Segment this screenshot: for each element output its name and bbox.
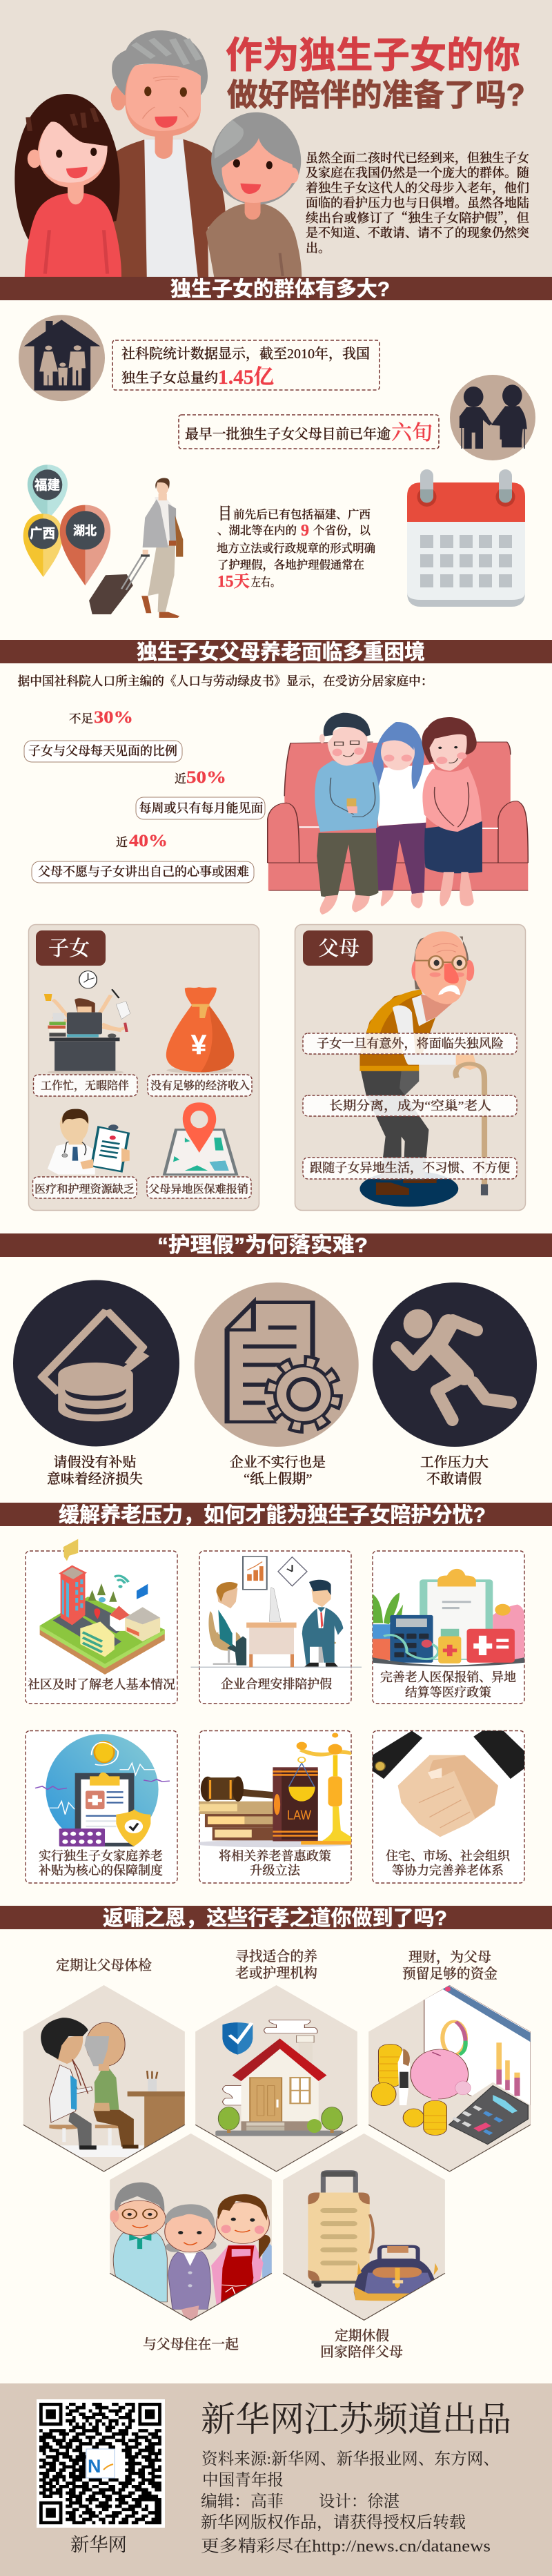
panel: hero header	[0, 0, 552, 277]
label: live together: 与父母住在一起	[143, 2336, 239, 2352]
panel: no subsidy	[13, 1280, 179, 1487]
intro paragraph: 虽然全面二孩时代已经到来，但独生子女	[306, 148, 529, 166]
icon: province map pins	[23, 465, 110, 585]
label: find care institution: 老或护理机构	[235, 1965, 317, 1981]
caption: cooperation second line: 等协力完善养老体系	[392, 1864, 504, 1877]
caption: lack of medical resources	[33, 1177, 137, 1198]
section heading: group size: 独生子女的群体有多大?	[170, 278, 390, 301]
panel: insurance card	[373, 1551, 524, 1704]
text: provinces with nursing leave: 左右。	[251, 576, 280, 589]
title line 1: 作为独生子女的你	[226, 35, 520, 76]
panel: subsidy card	[26, 1731, 177, 1883]
panel: company card	[191, 1551, 362, 1704]
illustration: doctor with clipboard	[48, 1109, 130, 1175]
label: financial planning: 预留足够的资金	[402, 1966, 497, 1982]
hexagon: doctor check-up	[23, 1985, 185, 2172]
text: no subsidy: 意味着经济损失	[47, 1471, 143, 1487]
text: provinces with nursing leave: 15天	[217, 572, 250, 591]
intro paragraph: 出。	[306, 239, 331, 257]
caption: not enough income: 没有足够的经济收入	[150, 1080, 250, 1092]
hexagon: living with parents	[110, 2134, 272, 2321]
QR code: N	[88, 2456, 101, 2477]
stat: nearly 40 percent: 父母不愿与子女讲出自己的心事或困难	[38, 865, 249, 879]
caption: risk of losing only child: 子女一旦有意外，将面临失独风险	[317, 1037, 504, 1051]
caption: cooperation: 住宅、市场、社会组织	[386, 1849, 511, 1863]
tag: parents	[303, 930, 373, 966]
label: regular leave: 回家陪伴父母	[320, 2344, 403, 2360]
illustration: law book and scale	[194, 1733, 355, 1847]
caption: subsidy: 实行独生子女家庭养老	[39, 1849, 163, 1863]
text: paper holiday: “纸上假期”	[244, 1471, 312, 1487]
QR code	[37, 2399, 165, 2528]
text: credits: 中国青年报	[202, 2471, 284, 2489]
illustration: office meeting	[191, 1557, 362, 1667]
icon: elderly couple	[450, 375, 535, 460]
section heading: how to relieve pressure: 缓解养老压力，如何才能为独生子女陪护分忧?	[59, 1504, 486, 1527]
illustration: handshake	[373, 1730, 524, 1837]
text: provinces with nursing leave: 个省份，以	[313, 524, 372, 537]
section heading: group size	[0, 277, 552, 301]
panel: footer	[0, 2383, 552, 2576]
illustration: isometric community	[40, 1539, 165, 1675]
section heading: filial duties	[0, 1906, 552, 1930]
stat: under 30 percent: 30%	[94, 708, 133, 727]
text: provinces with nursing leave: 了护理假，各地护理假通常在	[217, 558, 364, 572]
label: financial planning	[402, 1949, 497, 1982]
text: provinces with nursing leave: 前先后已有包括福建、广西	[233, 508, 371, 521]
illustration: family on sofa	[268, 713, 528, 915]
stat: nearly 40 percent: 40%	[129, 832, 168, 850]
text: provinces with nursing leave	[217, 505, 375, 591]
section heading: multiple difficulties: 独生子女父母养老面临多重困境	[137, 641, 425, 664]
icon: province map pins: 福建	[34, 478, 60, 493]
caption: insurance: 完善老人医保报销、异地	[380, 1670, 516, 1684]
stat: nearly 40 percent	[32, 832, 254, 883]
stat: under 30 percent	[24, 708, 182, 762]
section heading: filial duties: 返哺之恩，这些行孝之道你做到了吗?	[103, 1907, 447, 1930]
caption: subsidy second line: 补贴为核心的保障制度	[39, 1864, 163, 1877]
icon: province map pins: 湖北	[73, 524, 97, 538]
intro paragraph: 面临的看护压力也与日俱增。虽然各地陆	[306, 193, 529, 211]
panel: paper holiday	[195, 1282, 359, 1487]
icon: family in house	[19, 315, 105, 401]
caption: empty nest	[303, 1095, 517, 1116]
text: work pressure: 不敢请假	[426, 1471, 482, 1487]
icon: province map pins: 广西	[30, 526, 55, 541]
text: credits	[201, 2450, 500, 2555]
stat: under 30 percent: 不足	[69, 712, 93, 725]
hexagon: care home	[195, 1985, 357, 2172]
stat: nearly 40 percent: 近	[116, 836, 128, 849]
section heading: why nursing leave is hard	[0, 1233, 552, 1257]
text: LAW label: LAW	[287, 1808, 311, 1823]
panel: population facts	[19, 315, 535, 618]
caption: risk of losing only child	[303, 1033, 517, 1054]
text: credits: 新华网版权作品，请获得授权后转载	[201, 2513, 466, 2532]
text: no subsidy: 请假没有补贴	[54, 1454, 137, 1470]
intro paragraph: 续出台或修订了“独生子女陪护假”，但	[306, 208, 529, 226]
callout: over sixty: 最早一批独生子女父母目前已年逾	[185, 425, 391, 442]
tag: parents: 父母	[318, 937, 359, 960]
callout: 1.45 yi: 1.45亿	[218, 366, 274, 389]
hexagon: suitcases	[283, 2134, 445, 2320]
caption: busy at work	[33, 1075, 137, 1096]
text: work pressure: 工作压力大	[420, 1454, 489, 1470]
stat: nearly 50 percent	[136, 768, 265, 819]
illustration: medical insurance	[373, 1569, 524, 1666]
label: find care institution: 寻找适合的养	[235, 1949, 317, 1964]
text: credits: 更多精彩尽在http://news.cn/datanews	[201, 2537, 491, 2555]
caption: insurance second line: 结算等医疗政策	[405, 1686, 491, 1699]
text: provinces with nursing leave: 目	[218, 505, 232, 523]
caption: uncomfortable living elsewhere: 跟随子女异地生活，不习惯、不方便	[310, 1161, 510, 1175]
icon: calendar	[407, 469, 525, 607]
illustration: traveller with suitcase	[89, 478, 183, 618]
label: regular leave	[320, 2328, 403, 2360]
callout: over sixty: 六旬	[391, 422, 433, 445]
intro paragraph: 着独生子女这代人的父母步入老年，他们	[306, 178, 529, 196]
stat: nearly 50 percent: 近	[175, 772, 186, 786]
intro paragraph: 是不知道、不敢请、请不了的现象仍然突	[306, 224, 529, 242]
intro paragraph	[306, 148, 529, 257]
illustration: elderly man with cane	[359, 931, 488, 1207]
hexagon: financial planning	[368, 1985, 531, 2172]
text: provinces with nursing leave: 9	[301, 522, 309, 540]
caption: uncomfortable living elsewhere	[303, 1158, 517, 1179]
icon: running man	[373, 1282, 537, 1447]
panel: parents difficulties	[295, 925, 526, 1211]
text: survey intro: 据中国社科院人口所主编的《人口与劳动绿皮书》显示，在受访分居家庭中：	[18, 674, 433, 689]
panel: cooperation card	[373, 1730, 524, 1883]
section heading: why nursing leave is hard: “护理假”为何落实难?	[157, 1234, 368, 1257]
callout: over sixty	[179, 415, 439, 449]
text: paper holiday	[230, 1454, 326, 1487]
text: paper holiday: 企业不实行也是	[230, 1454, 326, 1470]
text: provinces with nursing leave: 地方立法或行政规章的形式明确	[217, 541, 375, 555]
panel: children difficulties	[29, 925, 259, 1211]
icon: document and gear	[195, 1282, 359, 1447]
label: financial planning: 理财，为父母	[408, 1949, 491, 1965]
text: brand name: 新华网	[70, 2535, 127, 2555]
text: credits: 设计：徐湛	[319, 2492, 400, 2511]
callout: 1.45 yi: 独生子女总量约	[121, 370, 218, 386]
label: regular leave: 定期休假	[335, 2328, 389, 2344]
caption: community: 社区及时了解老人基本情况	[28, 1677, 175, 1691]
caption: reimbursement difficulty	[147, 1177, 251, 1198]
title line 2: 做好陪伴的准备了吗?	[227, 77, 525, 113]
illustration: family of three	[14, 30, 302, 277]
stat: nearly 50 percent: 每周或只有每月能见面	[139, 801, 264, 815]
label: regular check-up: 定期让父母体检	[56, 1958, 152, 1973]
caption: empty nest: 长期分离，成为“空巢”老人	[329, 1099, 491, 1113]
illustration: busy office worker	[44, 971, 130, 1075]
panel: community card	[26, 1539, 177, 1704]
caption: legislation second line: 升级立法	[250, 1864, 301, 1877]
caption: legislation: 将相关养老普惠政策	[219, 1848, 331, 1863]
text: provinces with nursing leave: 、湖北等在内的	[217, 524, 297, 537]
symbol: yuan: ¥	[191, 1030, 207, 1060]
panel: survey statistics	[24, 708, 265, 883]
tag: children	[36, 930, 106, 966]
intro paragraph: 及家庭在我国仍然是一个庞大的群体。随	[306, 163, 529, 181]
illustration: money bag	[166, 987, 234, 1073]
stat: nearly 50 percent: 50%	[186, 768, 226, 787]
caption: not enough income	[148, 1075, 252, 1096]
caption: busy at work: 工作忙，无暇陪伴	[41, 1080, 129, 1092]
text: work pressure	[420, 1454, 489, 1487]
icon: coins and wallet	[13, 1280, 179, 1447]
panel: legislation card	[194, 1731, 355, 1883]
callout: 1.45 yi	[112, 340, 379, 390]
illustration: subsidy clipboard	[35, 1734, 170, 1846]
callout: 1.45 yi: 社科院统计数据显示，截至2010年，我国	[121, 345, 370, 362]
tag: children: 子女	[48, 937, 90, 960]
text: credits: 资料来源:新华网、新华报业网、东方网、	[201, 2450, 500, 2468]
text: producer: 新华网江苏频道出品	[201, 2400, 511, 2439]
section heading: multiple difficulties	[0, 640, 552, 664]
caption: reimbursement difficulty: 父母异地医保难报销	[148, 1182, 248, 1196]
caption: lack of medical resources: 医疗和护理资源缺乏	[34, 1183, 135, 1196]
text: credits: 编辑：高菲	[201, 2492, 284, 2511]
label: find care institution	[235, 1949, 317, 1981]
illustration: map with pin	[164, 1102, 237, 1175]
caption: company: 企业合理安排陪护假	[221, 1677, 332, 1691]
panel: work pressure	[373, 1282, 537, 1487]
stat: under 30 percent: 子女与父母每天见面的比例	[28, 744, 177, 758]
text: no subsidy	[47, 1454, 143, 1487]
